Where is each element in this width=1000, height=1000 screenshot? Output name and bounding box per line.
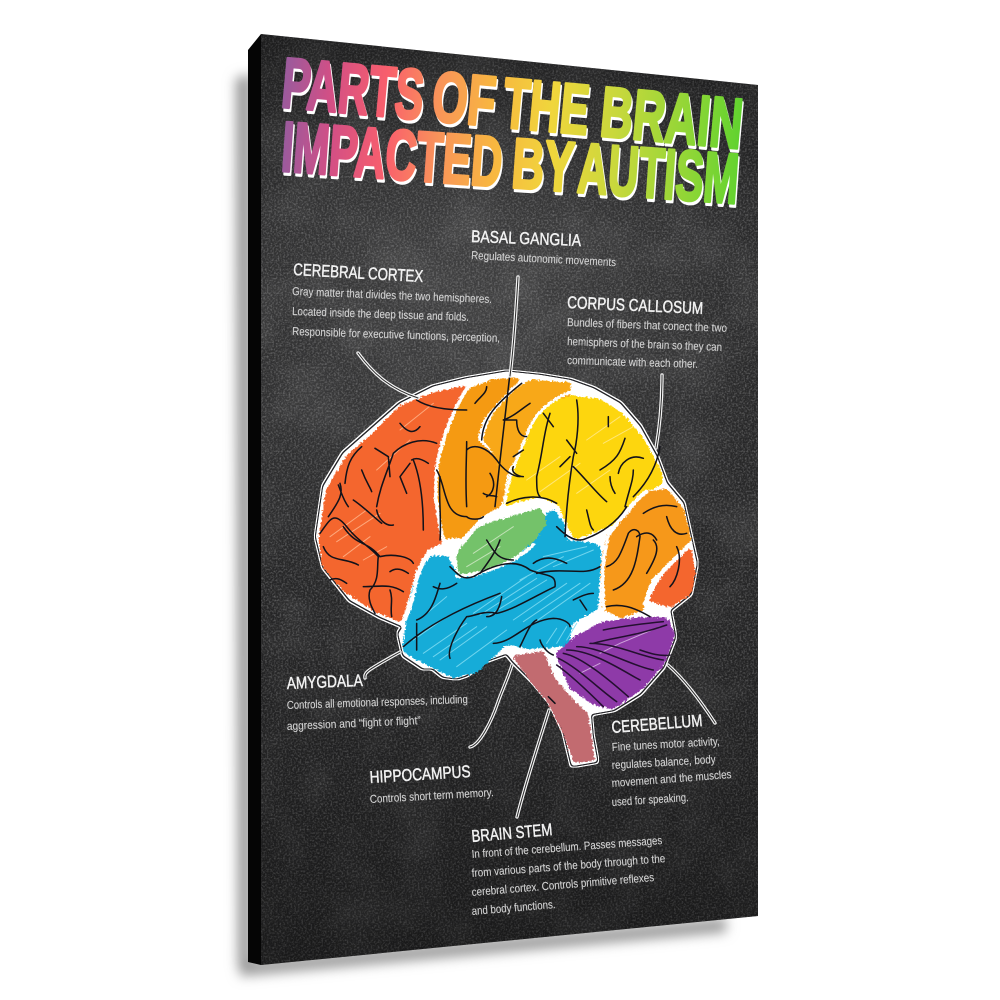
title line 1: PARTS	[279, 44, 427, 136]
leader: hippocampus	[470, 665, 512, 747]
region: brain stem	[513, 652, 594, 762]
label: amygdala: Controls all emotional responses, including	[287, 694, 468, 712]
label: cerebellum: regulates balance, body	[611, 754, 716, 772]
region: green	[457, 508, 546, 574]
leader: cerebellum	[668, 665, 715, 723]
label: cerebellum	[611, 711, 732, 809]
label: basal ganglia: BASAL GANGLIA	[471, 227, 582, 250]
title	[278, 44, 747, 223]
leader: brain stem	[517, 710, 549, 817]
label: basal ganglia	[471, 227, 616, 269]
region: orange band 1	[437, 378, 520, 538]
title line 2: BY	[511, 128, 578, 211]
leader: amygdala	[365, 652, 400, 678]
title line 2: BY	[509, 124, 577, 208]
label: corpus callosum: CORPUS CALLOSUM	[567, 293, 704, 318]
region: yellow lobe	[504, 396, 662, 538]
title line 1: OF	[429, 58, 499, 142]
label: corpus callosum: hemisphers of the brain so they can	[567, 336, 722, 354]
leader: corpus callosum	[656, 375, 662, 448]
chalk hatching	[330, 403, 660, 673]
label: hippocampus	[369, 762, 494, 806]
title line 2: IMPACTED	[279, 108, 505, 203]
label: hippocampus: Controls short term memory.	[369, 787, 494, 806]
brain silhouette	[316, 372, 697, 766]
canvas side edge	[248, 34, 261, 965]
label: basal ganglia: Regulates autonomic movements	[471, 250, 616, 269]
region: purple cerebellum	[556, 618, 674, 709]
label: cerebellum: used for speaking.	[611, 792, 689, 809]
label: amygdala: aggression and “fight or flight”	[287, 715, 421, 733]
label: amygdala	[286, 671, 468, 733]
title line 1: BRAIN	[599, 76, 747, 168]
label: brain stem: cerebral cortex. Controls primitive reflexes	[471, 872, 655, 899]
label: corpus callosum	[567, 293, 727, 371]
region: occipital orange	[602, 489, 691, 617]
title line 2: IMPACTED	[280, 111, 506, 206]
label: cerebral cortex: Gray matter that divides the two hemispheres.	[292, 286, 492, 306]
label: cerebral cortex	[292, 260, 500, 345]
label: brain stem: and body functions.	[471, 899, 556, 918]
title line 2: AUTISM	[575, 129, 741, 219]
label: cerebellum: movement and the muscles	[611, 769, 732, 790]
chalkboard panel	[255, 30, 765, 970]
label: brain stem: In front of the cerebellum. Passes messages	[471, 835, 663, 861]
label: hippocampus: HIPPOCAMPUS	[369, 762, 471, 787]
drop shadow	[236, 74, 726, 976]
title line 1: THE	[500, 64, 593, 151]
label: corpus callosum: Bundles of fibers that conect the two	[567, 317, 727, 335]
region: orange band 2	[483, 381, 571, 495]
region: red-orange rear	[649, 548, 695, 607]
label: corpus callosum: communicate with each other.	[567, 355, 698, 371]
leader: cerebral cortex	[358, 353, 418, 398]
label: cerebral cortex: Responsible for executive functions, perception,	[292, 326, 500, 345]
label: cerebral cortex: Located inside the deep tissue and folds.	[292, 306, 469, 324]
leader: basal ganglia	[510, 277, 518, 376]
label: cerebellum: Fine tunes motor activity,	[611, 736, 720, 754]
white chalk gaps between regions	[402, 381, 691, 625]
title line 1: BRAIN	[597, 73, 746, 165]
sulci lines	[320, 373, 687, 707]
region: blue temporal	[403, 510, 601, 677]
title line 1: THE	[501, 67, 594, 154]
label: cerebellum: CEREBELLUM	[611, 711, 703, 737]
label: cerebral cortex: CEREBRAL CORTEX	[293, 260, 424, 286]
label: brain stem: BRAIN STEM	[471, 820, 553, 846]
label: amygdala: AMYGDALA	[286, 671, 364, 693]
region: cerebral cortex (red-orange)	[319, 386, 468, 622]
title line 1	[278, 44, 747, 168]
label: brain stem: from various parts of the body through to the	[471, 853, 666, 880]
brain diagram	[316, 372, 697, 766]
title line 1: OF	[430, 61, 500, 145]
title line 1: PARTS	[280, 47, 428, 139]
title line 2: AUTISM	[576, 132, 743, 223]
label: brain stem	[471, 820, 666, 918]
